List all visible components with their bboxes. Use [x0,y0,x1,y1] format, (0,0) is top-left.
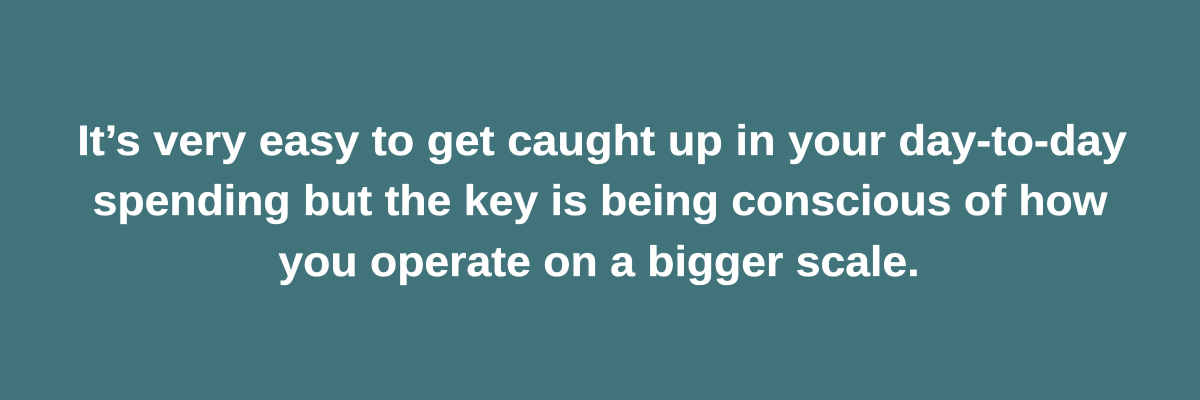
quote text [77,117,1127,286]
quote text: It’s very easy to get caught up in your day-to-day [77,117,1126,165]
quote text: spending but the key is being conscious of how [93,177,1107,225]
quote text: you operate on a bigger scale. [278,238,920,286]
